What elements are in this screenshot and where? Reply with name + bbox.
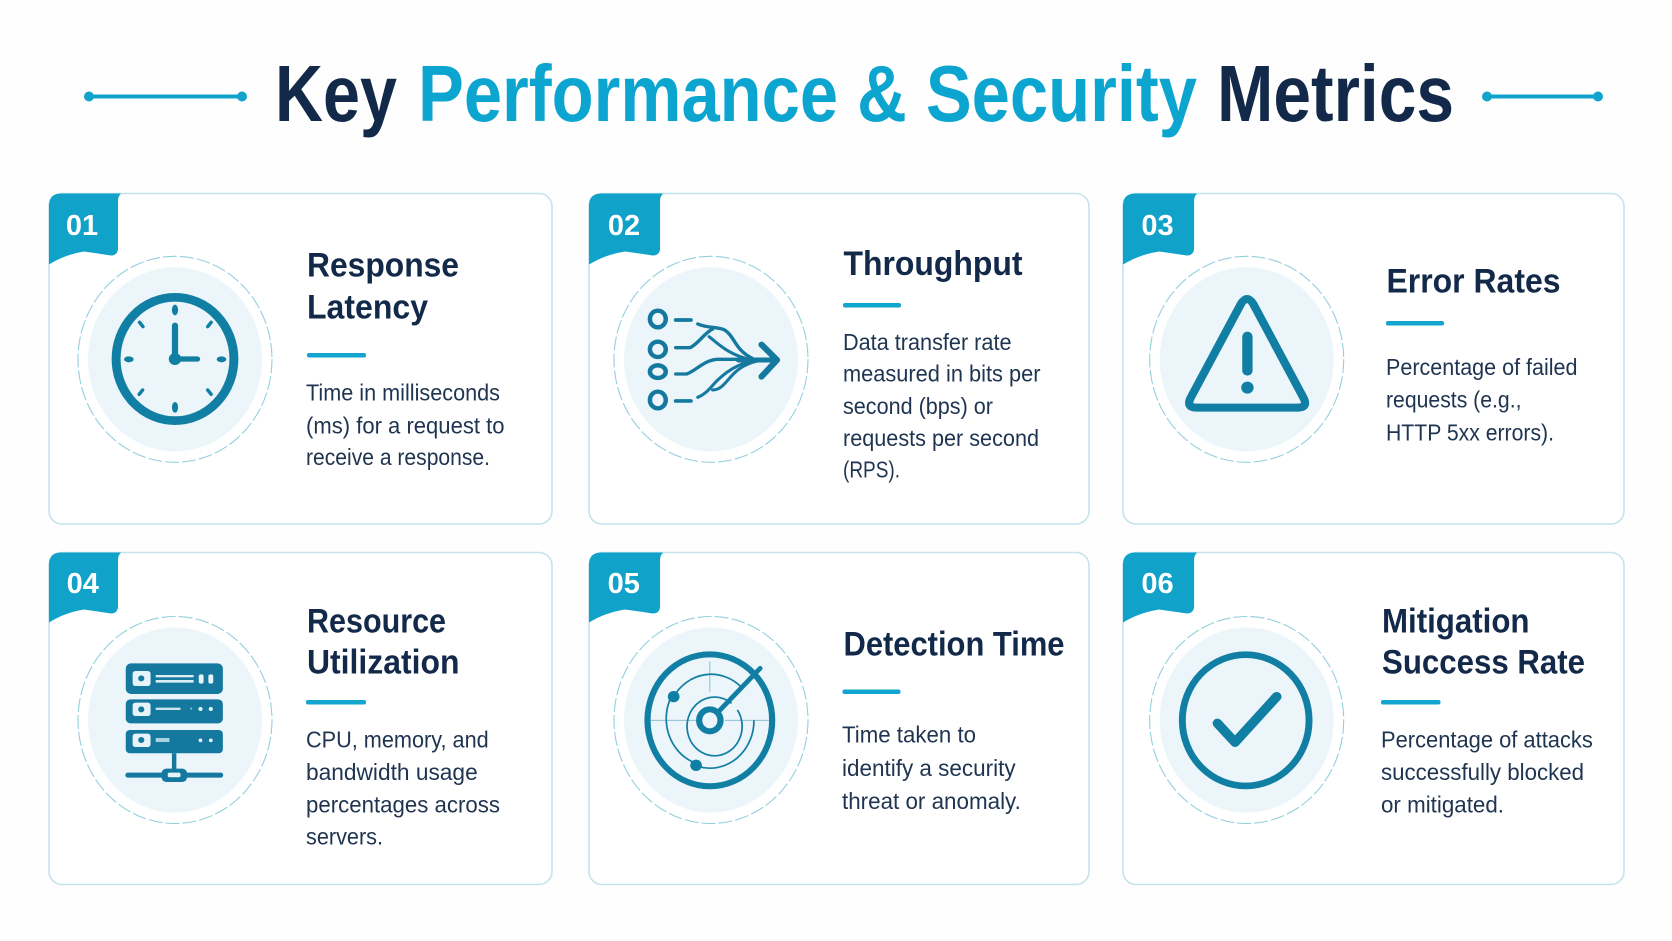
heading: Detection Time [844,626,1064,664]
description: threat or anomaly. [842,788,1021,814]
accent rule [1386,321,1444,326]
description: Time taken to [842,722,976,748]
heading [1382,603,1585,681]
description: (RPS). [843,457,900,483]
icon: clock [78,256,272,462]
accent rule [1381,700,1440,704]
badge 04: 04 [67,568,99,600]
heading: Throughput [844,245,1022,283]
icon: data flow arrow [614,256,808,462]
accent rule [843,303,901,308]
badge 03 [1123,194,1197,264]
description [1381,726,1593,818]
description: bandwidth usage [306,759,478,785]
title: Metrics [1217,49,1454,138]
accent rule [842,690,900,694]
badge 04 [49,552,121,622]
accent rule [306,700,366,704]
description: (ms) for a request to [306,412,504,438]
accent rule [307,353,366,358]
description [842,722,1021,814]
heading: Latency [307,288,428,326]
description: identify a security [842,755,1016,781]
badge 01: 01 [66,210,98,242]
icon: server rack [78,616,272,824]
badge 06 [1123,552,1197,622]
description: measured in bits per [843,361,1041,387]
panel: 03 error rates [1123,194,1624,524]
title accent line: left [84,92,247,102]
description: percentages across [306,792,500,818]
icon: warning triangle [1150,256,1344,462]
description: second (bps) or [843,393,993,419]
description: Time in milliseconds [306,380,500,406]
badge 05 [589,552,663,622]
badge 02: 02 [608,210,640,242]
icon: radar [614,616,808,824]
description: Percentage of failed [1386,354,1578,380]
description: servers. [306,823,383,849]
description: successfully blocked [1381,759,1584,785]
heading: Success Rate [1382,643,1585,681]
heading [307,603,460,681]
description: CPU, memory, and [306,726,489,752]
description: HTTP 5xx errors). [1386,420,1554,446]
title: Performance & Security [418,49,1197,138]
description: requests per second [843,425,1039,451]
description: receive a response. [306,444,490,470]
title accent line: right [1482,92,1603,102]
heading: Mitigation [1382,603,1530,641]
panel: 05 detection time [589,552,1089,884]
description [843,329,1041,483]
heading: Response [307,247,459,285]
badge 02 [589,194,663,264]
heading [307,247,459,326]
badge 03: 03 [1141,210,1174,242]
icon: check mark [1150,616,1344,824]
description: Data transfer rate [843,329,1012,355]
badge 01 [49,194,121,264]
badge 06: 06 [1141,568,1174,600]
panel: 06 mitigation success rate [1123,552,1624,884]
description: or mitigated. [1381,792,1504,818]
description: requests (e.g., [1386,386,1522,412]
heading: Utilization [307,643,460,681]
panel: 01 response latency [49,194,552,524]
description [1386,354,1578,446]
badge 05: 05 [608,568,640,600]
description: Percentage of attacks [1381,726,1593,752]
title: Key [275,49,397,138]
heading: Resource [307,603,446,641]
heading: Error Rates [1386,262,1560,300]
description [306,726,500,849]
panel: 04 resource utilization [49,552,552,884]
description [306,380,504,470]
panel: 02 throughput [589,194,1089,524]
